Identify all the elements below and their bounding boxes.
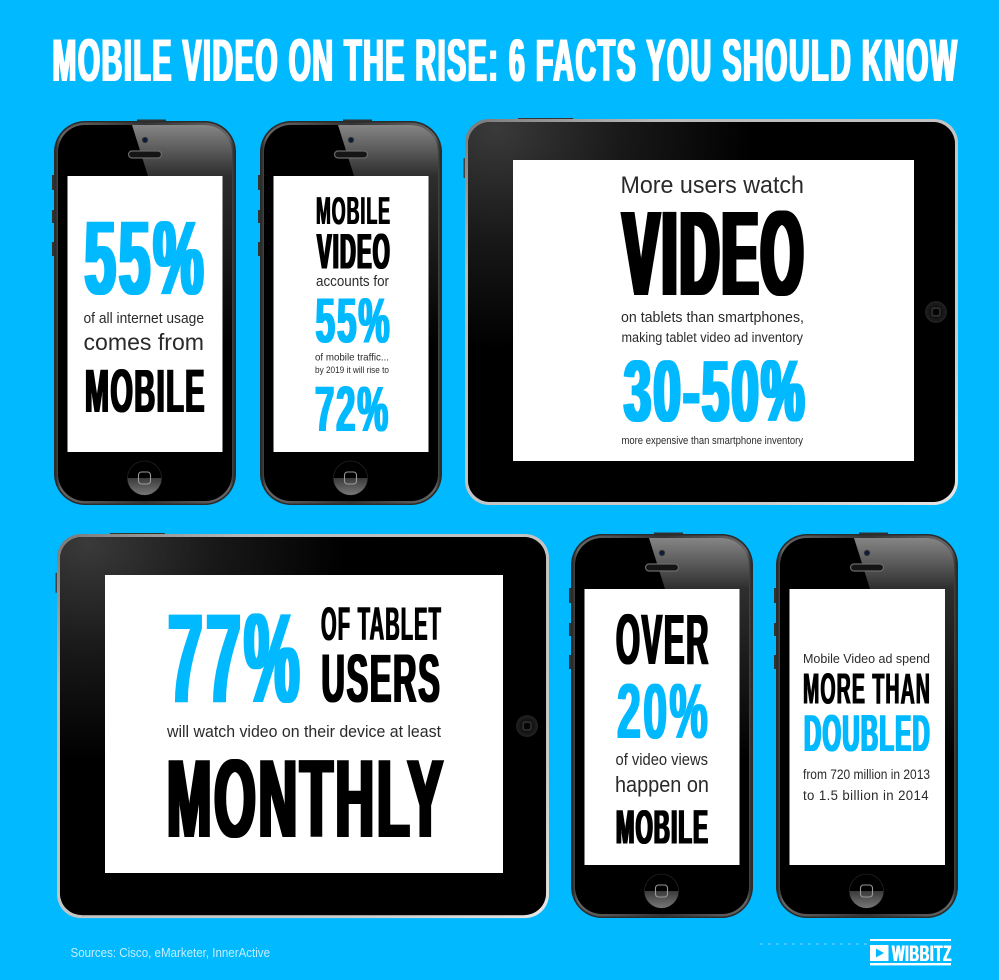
panel: phone 55% of internet usage xyxy=(52,120,236,505)
text: from 720 million in 2013: from 720 million in 2013 xyxy=(803,767,930,782)
device: phone frame xyxy=(52,120,236,505)
device: tablet frame xyxy=(56,533,549,918)
text: more expensive than smartphone inventory: more expensive than smartphone inventory xyxy=(622,435,803,447)
panel: phone mobile video traffic: MOBILE xyxy=(316,190,391,233)
logo: Wibbitz xyxy=(870,939,952,966)
panel: phone over 20% of views xyxy=(569,532,753,918)
screen xyxy=(274,176,428,452)
panel: phone ad spend doubled xyxy=(774,532,958,918)
panel: tablet 77% of tablet users: USERS xyxy=(322,640,442,717)
device: phone frame xyxy=(258,120,442,505)
text: comes from: comes from xyxy=(84,329,204,355)
stat: 20%: 20% xyxy=(617,667,710,755)
panel: tablet 77% of tablet users: 77% xyxy=(168,587,303,729)
panel: phone mobile video traffic xyxy=(258,120,442,505)
panel: tablet 77% of tablet users: OF TABLET xyxy=(321,597,442,650)
stat: 30-50%: 30-50% xyxy=(624,343,807,440)
device: phone frame xyxy=(774,532,958,918)
text: of mobile traffic: of mobile traffic... xyxy=(315,352,389,364)
panel: tablet 77% of tablet users: MONTHLY xyxy=(167,737,446,861)
text: of video views: of video views xyxy=(616,750,708,769)
logo: Wibbitz: WIBBITZ xyxy=(892,941,952,966)
panel: tablet 77% of tablet users xyxy=(56,533,549,918)
text: on tablets than smartphones: on tablets than smartphones, xyxy=(621,309,804,326)
stat: 55%: 55% xyxy=(84,200,206,317)
text: happen on: happen on xyxy=(615,772,709,797)
screen xyxy=(790,589,945,865)
text: to 1.5 billion in 2014: to 1.5 billion in 2014 xyxy=(803,788,929,803)
text: will watch video: will watch video on their device at least xyxy=(166,722,441,741)
panel: tablet more users watch video xyxy=(464,118,958,505)
text: accounts for: accounts for xyxy=(316,273,389,290)
sources: Sources: Cisco, eMarketer, InnerActive xyxy=(70,946,270,960)
panel: phone over 20% of views: OVER xyxy=(616,601,710,680)
screen xyxy=(513,160,914,461)
screen xyxy=(68,176,222,452)
stat: 55%: 55% xyxy=(316,284,392,356)
device: tablet frame xyxy=(464,118,958,505)
text: of all internet usage: of all internet usage xyxy=(84,310,204,327)
panel: phone over 20% of views: MOBILE xyxy=(616,802,709,854)
stat: 72%: 72% xyxy=(315,373,390,445)
panel: phone 55% of internet usage: MOBILE xyxy=(85,357,206,425)
screen xyxy=(584,589,740,865)
text: making tablet video ad inventory: making tablet video ad inventory xyxy=(622,330,803,345)
panel: phone mobile video traffic: VIDEO xyxy=(317,224,391,280)
text: by 2019 it will rise to: by 2019 it will rise to xyxy=(315,365,389,375)
text: Mobile Video ad spend: Mobile Video ad spend xyxy=(803,651,930,666)
device: phone frame xyxy=(569,532,753,918)
text: More users watch: More users watch xyxy=(620,172,804,199)
screen xyxy=(105,575,503,873)
